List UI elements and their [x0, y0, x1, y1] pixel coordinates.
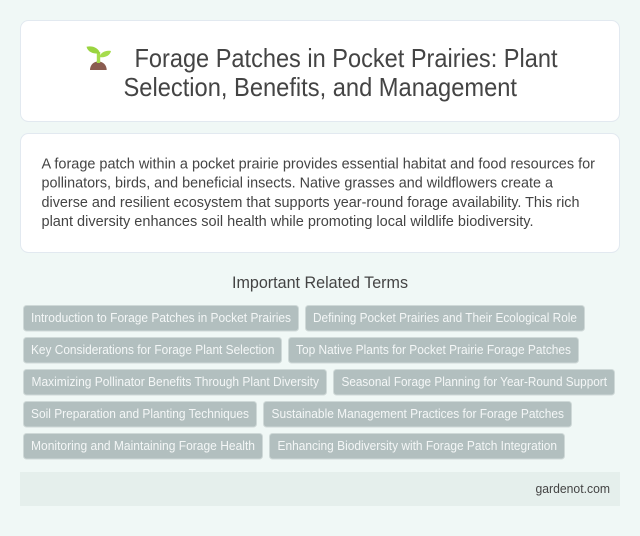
chip: soil preparation [24, 402, 256, 427]
panel: title card [20, 20, 620, 122]
description text: pollinators, birds, and beneficial insects. Native grasses and wildflowers create a [42, 174, 554, 192]
chip: defining pocket prairies: Defining Pocket Prairies and Their Ecological Role [313, 310, 577, 325]
chip: soil preparation: Soil Preparation and Planting Techniques [31, 406, 249, 421]
chip: defining pocket prairies [306, 306, 584, 331]
icon: seedling [86, 46, 111, 70]
chip: key considerations [24, 338, 282, 363]
chip: seasonal forage planning: Seasonal Forage Planning for Year-Round Support [342, 374, 607, 389]
chip: monitoring: Monitoring and Maintaining Forage Health [31, 438, 255, 453]
chip: top native plants [288, 338, 578, 363]
footer source text: gardenot.com [536, 481, 610, 496]
chip: sustainable management: Sustainable Management Practices for Forage Patches [272, 406, 564, 421]
description text [42, 155, 595, 230]
title: Forage Patches in Pocket Prairies: Plant [134, 43, 558, 73]
chip: sustainable management [264, 402, 572, 427]
chip: introduction: Introduction to Forage Patches in Pocket Prairies [31, 310, 291, 325]
chip: enhancing biodiversity [270, 434, 564, 459]
chip: maximizing pollinator benefits [24, 370, 326, 395]
chip: seasonal forage planning [334, 370, 614, 395]
footer [20, 472, 620, 506]
panel: description card [20, 134, 620, 252]
panel: related term chips [24, 306, 614, 459]
chip: maximizing pollinator benefits: Maximizing Pollinator Benefits Through Plant Diversity [32, 374, 319, 389]
description text: A forage patch within a pocket prairie provides essential habitat and food resources for [42, 155, 595, 172]
chip: enhancing biodiversity: Enhancing Biodiversity with Forage Patch Integration [278, 438, 557, 453]
chip: key considerations: Key Considerations for Forage Plant Selection [31, 342, 274, 357]
chip: introduction [24, 306, 298, 331]
heading: related terms: Important Related Terms [232, 273, 408, 292]
chip: monitoring [24, 434, 262, 459]
chip: top native plants: Top Native Plants for Pocket Prairie Forage Patches [296, 342, 571, 357]
description text: plant diversity enhances soil health while promoting local wildlife biodiversity. [42, 213, 534, 230]
title: Selection, Benefits, and Management [124, 72, 518, 102]
title [124, 43, 558, 102]
description text: diverse and resilient ecosystem that supports year-round forage availability. This rich [42, 194, 580, 211]
